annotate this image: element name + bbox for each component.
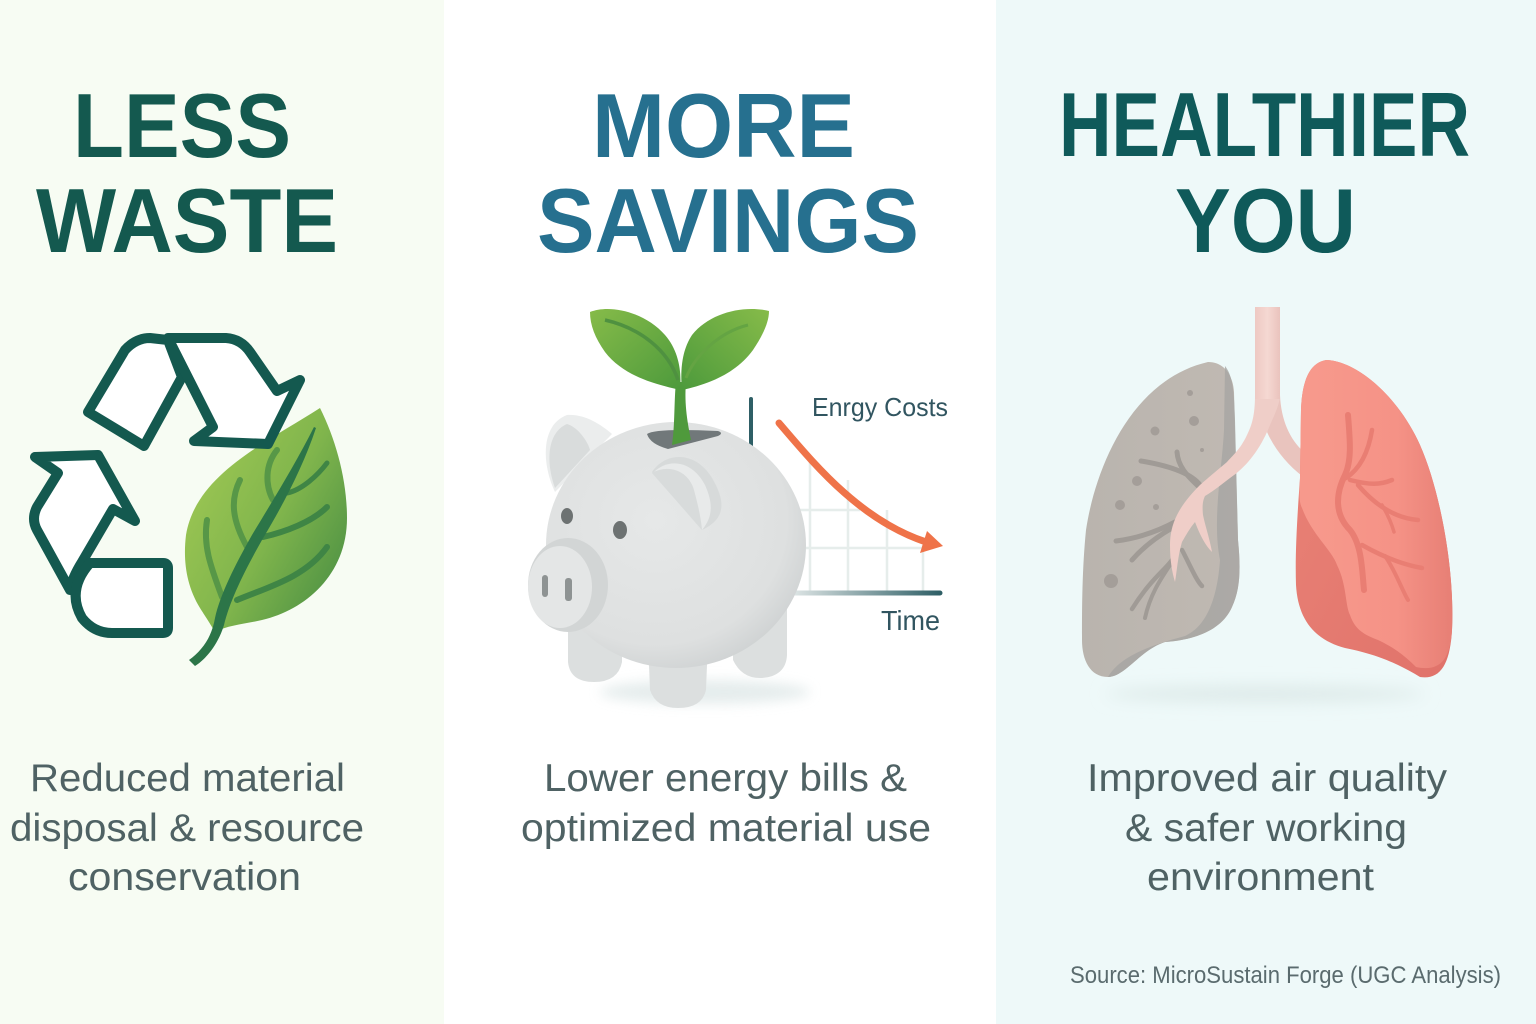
lung: healthy right xyxy=(1296,360,1452,677)
description: more savings: optimized material use xyxy=(521,807,931,850)
chart: energy costs over time xyxy=(751,392,948,636)
damaged airways xyxy=(1116,452,1202,618)
right bronchus behind lung xyxy=(1267,395,1304,476)
description: less waste xyxy=(10,757,364,899)
icon: piggy bank with sprout xyxy=(528,309,810,708)
lungs shadow xyxy=(1105,686,1425,702)
lung: damaged left xyxy=(1082,362,1240,677)
heading: healthier you xyxy=(1059,75,1470,272)
panel: healthier you xyxy=(996,0,1536,1024)
heading: less waste: WASTE xyxy=(36,171,338,272)
description: more savings: Lower energy bills & xyxy=(544,757,907,800)
description: healthier you xyxy=(1087,757,1448,899)
damage spots xyxy=(1104,390,1204,588)
pig shadow xyxy=(600,680,810,704)
description: less waste: disposal & resource xyxy=(10,807,364,850)
icon: lungs xyxy=(1082,307,1452,702)
chart grid xyxy=(800,462,925,593)
healthy airways xyxy=(1338,415,1422,600)
sprout xyxy=(590,309,769,445)
pig body xyxy=(546,422,806,668)
heading: more savings: SAVINGS xyxy=(537,171,919,272)
pig eyes xyxy=(561,508,627,539)
arrow: falling energy cost curve xyxy=(779,423,943,553)
description: healthier you: environment xyxy=(1147,856,1374,899)
pig back ear xyxy=(546,415,612,492)
panel: more savings xyxy=(444,0,996,1024)
description: healthier you: & safer working xyxy=(1125,807,1407,850)
icon: leaf xyxy=(185,408,347,666)
heading: more savings xyxy=(537,76,919,272)
chart axes xyxy=(751,399,940,593)
recycle arrow: left xyxy=(34,455,168,633)
trachea and left bronchus xyxy=(1170,307,1280,582)
panel: less waste xyxy=(0,0,444,1024)
description: less waste: conservation xyxy=(68,856,301,899)
heading: less waste xyxy=(36,76,338,272)
heading: more savings: MORE xyxy=(592,76,855,177)
pig front ear xyxy=(652,457,721,530)
icon: recycling arrows with leaf xyxy=(34,338,347,666)
label: energy costs: Enrgy Costs xyxy=(812,392,948,422)
source note: Source: MicroSustain Forge (UGC Analysis) xyxy=(1070,962,1501,989)
description: less waste: Reduced material xyxy=(30,757,345,800)
description: more savings xyxy=(521,757,931,850)
coin slot xyxy=(647,430,721,449)
pig legs xyxy=(568,600,787,708)
heading: healthier you: YOU xyxy=(1175,171,1356,272)
pig snout xyxy=(528,538,608,632)
description: healthier you: Improved air quality xyxy=(1087,757,1448,800)
recycle arrow: top xyxy=(88,338,300,446)
heading: less waste: LESS xyxy=(73,76,291,177)
label: time: Time xyxy=(881,605,940,636)
